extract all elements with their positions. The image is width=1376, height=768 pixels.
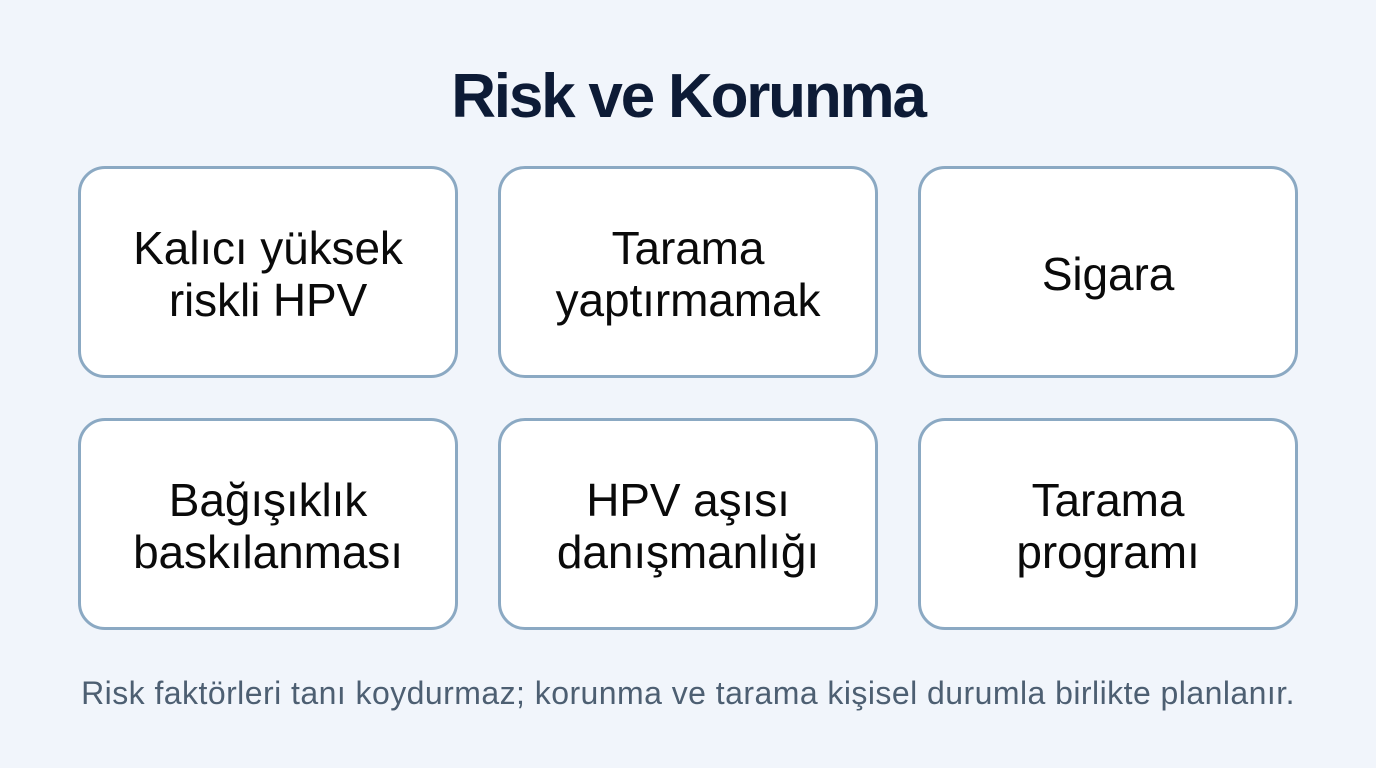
card: Kalıcı yüksek riskli HPV: riskli HPV: [169, 274, 367, 326]
card: Sigara: Sigara: [1042, 248, 1174, 300]
card: HPV aşısı danışmanlığı: danışmanlığı: [557, 526, 819, 578]
card: Tarama yaptırmamak: yaptırmamak: [556, 274, 820, 326]
footer note: Risk faktörleri tanı koydurmaz; korunma ve tarama kişisel durumla birlikte planlanır.: [81, 675, 1295, 711]
card: Tarama programı: programı: [1016, 526, 1200, 578]
card: Tarama yaptırmamak: [498, 166, 878, 378]
card: Bağışıklık baskılanması: baskılanması: [133, 526, 403, 578]
card: Sigara: [918, 166, 1298, 378]
card: HPV aşısı danışmanlığı: [498, 418, 878, 630]
card: Tarama yaptırmamak: Tarama: [612, 222, 764, 274]
card: Tarama programı: [918, 418, 1298, 630]
title: Risk ve Korunma: [451, 62, 925, 131]
card: Kalıcı yüksek riskli HPV: Kalıcı yüksek: [133, 222, 403, 274]
card: Tarama programı: Tarama: [1032, 474, 1184, 526]
card: Bağışıklık baskılanması: [78, 418, 458, 630]
card: HPV aşısı danışmanlığı: HPV aşısı: [586, 474, 790, 526]
card: Kalıcı yüksek riskli HPV: [78, 166, 458, 378]
card: Bağışıklık baskılanması: Bağışıklık: [169, 474, 367, 526]
